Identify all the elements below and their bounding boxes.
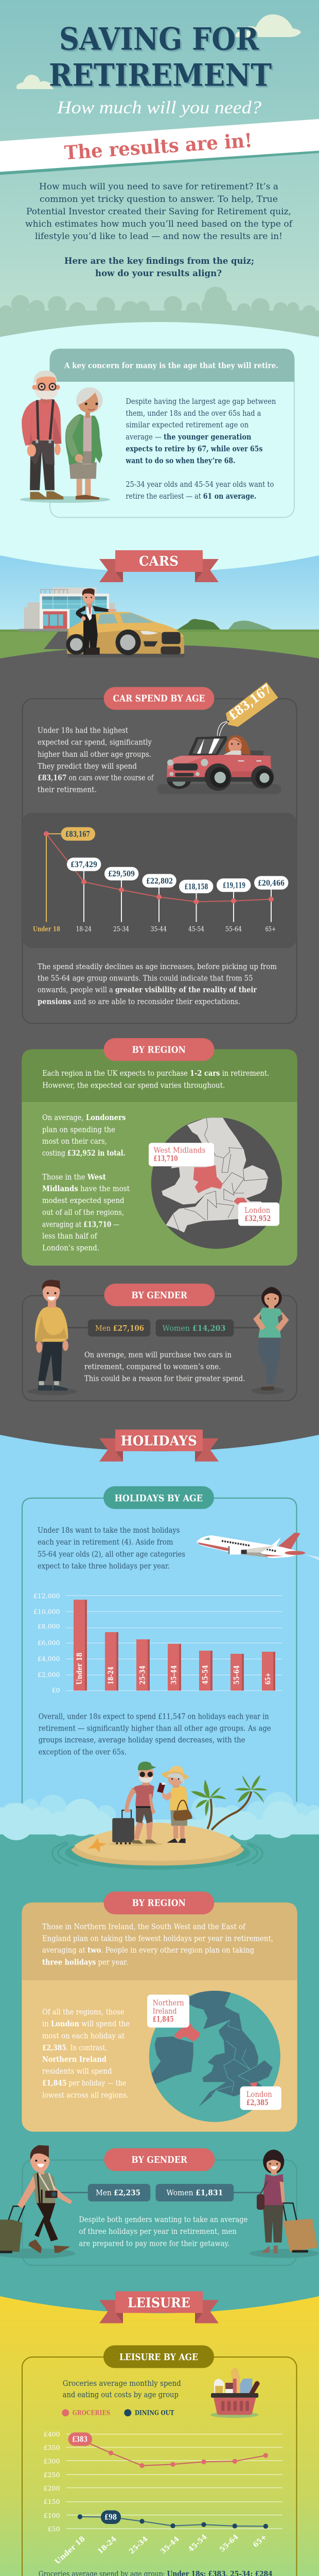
text: under 18s car spend: Under 18s had the highest [38, 727, 128, 735]
text: region findings: most on their cars, [42, 1138, 107, 1146]
chip: men spend [88, 2184, 150, 2201]
text: holiday gender comparison: are prepared to pay more for their getaway. [79, 2240, 229, 2248]
text: gender comparison: This could be a reason for their greater spend. [84, 1375, 245, 1383]
price tag: £83,167 [225, 681, 274, 723]
ribbon: leisure: LEISURE [128, 2295, 190, 2311]
chart: groceries and dining out: Under 18 [54, 2535, 87, 2566]
chart: car spend by age: £20,466 [258, 879, 285, 888]
text: holidays per year by region: averaging at two. People in every other region plan on taking [42, 1946, 254, 1955]
text: under 18s car spend: their retirement. [38, 786, 97, 794]
panel: cars by region [22, 1038, 297, 1266]
pill: by region: BY REGION [132, 1898, 186, 1909]
chart: holiday spend by age: Under 18 [76, 1653, 84, 1685]
text: holiday gender comparison [79, 2216, 247, 2248]
chip: men spend [88, 1319, 150, 1336]
map: England and Wales [151, 1117, 282, 1249]
text: region findings: modest expected spend [42, 1197, 125, 1205]
text: under 18s car spend [38, 727, 154, 794]
background: sea [0, 1834, 319, 2318]
title: RETIREMENT [49, 58, 272, 94]
chip: women spend: Women £14,203 [163, 1324, 225, 1333]
panel: cars by gender [23, 1280, 296, 1401]
illustration: elderly couple [20, 370, 110, 503]
text: holidays per year by region: England plan on taking the fewest holidays per year in retirement, [42, 1935, 273, 1943]
illustration: man with suitcase and camera [0, 2145, 75, 2259]
panel: holidays by region [22, 1892, 297, 2132]
chart: groceries and dining out: £383 [72, 2435, 87, 2444]
section heading: leisure by age: LEISURE BY AGE [119, 2352, 198, 2363]
illustration: clouds over the sea [0, 1791, 319, 1840]
chart: holiday spend by age: £12,000 [33, 1592, 60, 1600]
chart: car spend by age: 55-64 [225, 926, 242, 934]
pill: by region [104, 1892, 214, 1914]
section heading: leisure by age [22, 2345, 296, 2576]
text: holiday spend summary: exception of the over 65s. [39, 1749, 127, 1757]
ribbon: cars: CARS [139, 554, 179, 569]
text: gender comparison [84, 1351, 245, 1383]
chart: car spend by age: £29,509 [108, 870, 135, 878]
text: under 18s car spend: £83,167 on cars over the course of [38, 774, 154, 783]
chart: groceries and dining out [44, 2430, 282, 2566]
text: region findings: Those in the West [42, 1173, 106, 1181]
section heading: holidays by age: HOLIDAYS BY AGE [115, 1493, 203, 1504]
label: West Midlands: £13,710 [153, 1155, 178, 1163]
background: leisure gradient [0, 2296, 319, 2576]
card text: want to do so when they’re 68. [126, 456, 235, 465]
section heading: car spend by age [23, 687, 296, 1023]
chart: car spend by age: £37,429 [70, 860, 97, 869]
label: Northern Ireland: Northern [153, 1999, 184, 2007]
chart: car spend by age: 35-44 [151, 926, 167, 934]
text: holidays per year by region [42, 1923, 273, 1967]
chart: car spend by age: 65+ [265, 926, 276, 934]
label: London [240, 2087, 281, 2110]
label: London: London [244, 1207, 270, 1215]
intro text: lifestyle you’d like to lead — and now the results are in! [35, 231, 282, 241]
illustration: red convertible with price tag [157, 722, 281, 794]
background: holidays sky [0, 1435, 319, 1839]
text: holiday regional spend [42, 2008, 130, 2099]
text: holiday gender comparison: of three holidays per year in retirement, men [79, 2228, 237, 2236]
chart: car spend by age: £18,158 [184, 883, 208, 891]
text: chart caption [63, 2380, 181, 2399]
text: spend declines: onwards, people will a greater visibility of the reality of their [38, 986, 257, 994]
intro text: common yet tricky question to answer. To help, True [40, 194, 278, 204]
intro text [25, 182, 293, 278]
chart: car spend by age: £83,167 [65, 830, 90, 839]
label: West Midlands: West Midlands [153, 1147, 206, 1155]
background: pale intro section [0, 322, 319, 618]
text: under 18s holidays: each year in retirement (4). Aside from [38, 1538, 173, 1547]
card text: them, under 18s and the over 65s had a [126, 410, 261, 418]
pill: by region [104, 1038, 214, 1061]
ribbon: holidays: HOLIDAYS [120, 1433, 197, 1449]
illustration: woman with suitcase [250, 2150, 319, 2258]
text: gender comparison: retirement, compared to women’s one. [84, 1363, 221, 1371]
chart: car spend by age [23, 812, 296, 948]
background: treeline hills [0, 286, 319, 344]
illustration: man in yellow jumper [27, 1280, 77, 1395]
label: West Midlands [149, 1143, 214, 1166]
text: chart caption: Groceries average monthly spend [63, 2380, 181, 2388]
clouds [16, 14, 301, 89]
chart: holiday spend by age: 18-24 [107, 1667, 115, 1685]
chart: groceries and dining out: £100 [44, 2512, 60, 2519]
background: car showroom sky [0, 555, 319, 634]
text: holiday regional spend: Northern Ireland [42, 2055, 107, 2064]
card heading: A key concern for many is the age that they will retire. [64, 361, 278, 370]
text: region findings: Midlands have the most [42, 1184, 130, 1193]
text: holiday regional spend: £2,385. In contrast, [42, 2043, 107, 2052]
chart: car spend by age: £22,802 [146, 877, 173, 886]
chip: men spend: Men £27,106 [95, 1324, 144, 1333]
card text: Despite having the largest age gap between [126, 398, 276, 406]
intro text: Potential Investor created their Saving for Retirement quiz, [26, 207, 291, 216]
card text [126, 398, 276, 501]
label: London: London [246, 2091, 272, 2099]
panel: retirement age card [50, 349, 294, 517]
text: spend declines [38, 963, 277, 1006]
ribbon: leisure [99, 2291, 219, 2323]
text: holiday regional spend: in London will spend the [42, 2020, 130, 2028]
text: region findings: out of all of the regions, [42, 1209, 124, 1217]
chart: holiday spend by age: £4,000 [38, 1655, 60, 1663]
text: spend declines: the 55-64 age group onwards. This could indicate that from 55 [38, 974, 253, 982]
chip: men spend: Men £2,235 [96, 2188, 140, 2197]
chip: women spend [155, 1319, 234, 1336]
text: holiday regional spend: most on each holiday at [42, 2032, 125, 2040]
illustration: hills behind showroom [0, 619, 319, 632]
title [49, 21, 272, 94]
text: region findings: On average, Londoners [42, 1113, 126, 1122]
text: region findings: plan on spending the [42, 1126, 115, 1134]
chart: holiday spend by age: 65+ [264, 1673, 273, 1685]
card text: similar expected retirement age on [126, 421, 249, 430]
text: region findings: London’s spend. [42, 1244, 99, 1252]
intro text: how do your results align? [95, 268, 222, 278]
chart: holiday spend by age: 35-44 [170, 1665, 178, 1685]
label: London: £2,385 [246, 2098, 269, 2107]
chart: car spend by age: 18-24 [76, 926, 92, 934]
illustration: desert island with retired couple [52, 1761, 268, 1870]
text: region intro [42, 1069, 269, 1090]
label: Northern Ireland: £1,845 [153, 2015, 174, 2024]
chart: holiday spend by age: £8,000 [38, 1622, 60, 1630]
text: spend declines: The spend steadily declines as age increases, before picking up from [38, 963, 277, 971]
text: gender comparison: On average, men will purchase two cars in [84, 1351, 232, 1359]
label: Northern Ireland: Ireland [153, 2008, 177, 2016]
section heading: car spend by age: CAR SPEND BY AGE [113, 693, 205, 704]
map: British Isles [149, 1990, 280, 2122]
chart: holiday spend by age: £2,000 [38, 1671, 60, 1679]
text: under 18s car spend: expected car spend, significantly [38, 739, 152, 747]
pill: by gender: BY GENDER [131, 1290, 188, 1301]
text: holiday spend summary: retirement — significantly higher than all other age groups. As age [39, 1724, 271, 1733]
text: region findings: less than half of [42, 1232, 98, 1241]
pill: by gender: BY GENDER [131, 2155, 188, 2165]
label: London [238, 1202, 279, 1226]
intro text: How much will you need to save for retirement? It’s a [39, 182, 278, 192]
chart: groceries and dining out: £200 [44, 2484, 60, 2492]
card text: average — the younger generation [126, 433, 252, 442]
banner: the results are in [0, 119, 319, 175]
background: intro sky [0, 0, 319, 340]
chart: groceries and dining out: 35-44 [159, 2535, 181, 2556]
text: region intro: Each region in the UK expects to purchase 1-2 cars in retirement. [42, 1069, 269, 1078]
text: under 18s car spend: They predict they will spend [38, 762, 137, 771]
chart: holiday spend by age: 25-34 [139, 1665, 147, 1685]
illustration: woman in green top [252, 1287, 288, 1394]
card text: expects to retire by 67, while over 65s [126, 445, 262, 453]
text: under 18s holidays: Under 18s want to take the most holidays [38, 1527, 180, 1535]
illustration: car showroom, salesman and yellow car [20, 587, 185, 657]
text: holidays per year by region: Those in Northern Ireland, the South West and the East of [42, 1923, 246, 1931]
subtitle: How much will you need? [57, 97, 262, 117]
card text: 25-34 year olds and 45-54 year olds want to [126, 481, 274, 489]
chart: holiday spend by age [33, 1592, 282, 1694]
banner: the results are in: The results are in! [64, 129, 253, 164]
chart: groceries and dining out: 65+ [252, 2533, 269, 2549]
title: SAVING FOR [59, 21, 259, 57]
chart legend [62, 2409, 174, 2417]
chart: holiday spend by age: £10,000 [33, 1607, 60, 1616]
chart: groceries and dining out: £98 [104, 2513, 117, 2521]
text: holidays per year by region: three holidays per year. [42, 1958, 128, 1967]
ribbon: holidays [99, 1430, 219, 1462]
text: holiday regional spend: Of all the regions, those [42, 2008, 125, 2016]
chart: holiday spend by age: £6,000 [38, 1639, 60, 1647]
label: London: £32,952 [244, 1214, 271, 1223]
icon: grocery basket [210, 2368, 260, 2418]
chart: groceries and dining out: £300 [44, 2458, 60, 2465]
text: under 18s holidays [38, 1527, 185, 1570]
text: region findings: costing £32,952 in total. [42, 1149, 126, 1158]
label: Northern Ireland [147, 1995, 189, 2028]
background: grass [0, 630, 319, 666]
text: under 18s holidays: 55-64 year olds (2), all other age categories [38, 1550, 185, 1558]
chart: holiday spend by age: 45-54 [202, 1665, 210, 1685]
chart: car spend by age: £19,119 [223, 881, 245, 890]
text: holiday spend summary: Overall, under 18s expect to spend £11,547 on holidays each year in [39, 1713, 269, 1721]
section heading: holidays by age [22, 1486, 296, 1803]
chart: groceries and dining out: £150 [44, 2498, 60, 2505]
chart: car spend by age: 25-34 [113, 926, 129, 934]
chart: holiday spend by age: £0 [52, 1686, 60, 1694]
chart: car spend by age: Under 18 [33, 926, 60, 934]
chart: groceries and dining out: £400 [44, 2430, 60, 2438]
chart: groceries and dining out: 18-24 [96, 2535, 118, 2556]
text: region findings [42, 1113, 130, 1252]
pill: by gender [104, 1284, 215, 1306]
chart: groceries and dining out: £250 [44, 2471, 60, 2479]
chart legend: GROCERIES [73, 2410, 110, 2417]
pill: by gender [104, 2148, 215, 2171]
background: road grey cars section [0, 645, 319, 1458]
text: under 18s car spend: higher than all other age groups. [38, 751, 151, 759]
text: region intro: However, the expected car spend varies throughout. [42, 1081, 225, 1090]
panel: holidays by gender [0, 2145, 319, 2265]
chart: car spend by age: 45-54 [188, 926, 204, 934]
text: holiday gender comparison: Despite both genders wanting to take an average [79, 2216, 247, 2224]
text: under 18s holidays: expect to take three holidays per year. [38, 1562, 170, 1570]
card text: retire the earliest — at 61 on average. [126, 492, 256, 501]
chart: groceries and dining out: 55-64 [218, 2533, 240, 2554]
text: region findings: averaging at £13,710 — [42, 1220, 119, 1229]
text: spend declines: pensions and so are able to reconsider their expectations. [38, 997, 240, 1006]
chip: women spend [155, 2184, 234, 2201]
chart: groceries and dining out: 25-34 [128, 2535, 150, 2556]
chart: groceries and dining out: £350 [44, 2444, 60, 2451]
pill: by region: BY REGION [132, 1045, 186, 1055]
text: holiday spend summary: groups increase, average holiday spend decreases, with the [39, 1736, 245, 1744]
text: holiday regional spend: lowest across all regions. [42, 2091, 129, 2099]
intro text: Here are the key findings from the quiz; [64, 256, 254, 266]
text: holiday regional spend: residents will spend [42, 2067, 112, 2076]
chip: women spend: Women £1,831 [166, 2188, 223, 2197]
illustration: aeroplane [197, 1533, 319, 1560]
chart: holiday spend by age: 55-64 [233, 1665, 241, 1685]
ribbon: cars [99, 550, 219, 582]
chart legend: DINING OUT [135, 2410, 174, 2417]
text: chart caption: and eating out costs by age group [63, 2391, 179, 2399]
chart: groceries and dining out: £50 [48, 2525, 60, 2533]
text: holiday regional spend: £1,845 per holiday — the [42, 2079, 126, 2088]
intro text: which estimates how much you’ll need based on the type of [25, 219, 293, 229]
chart: groceries and dining out: 45-54 [187, 2533, 209, 2554]
text: holiday spend summary [39, 1713, 271, 1757]
